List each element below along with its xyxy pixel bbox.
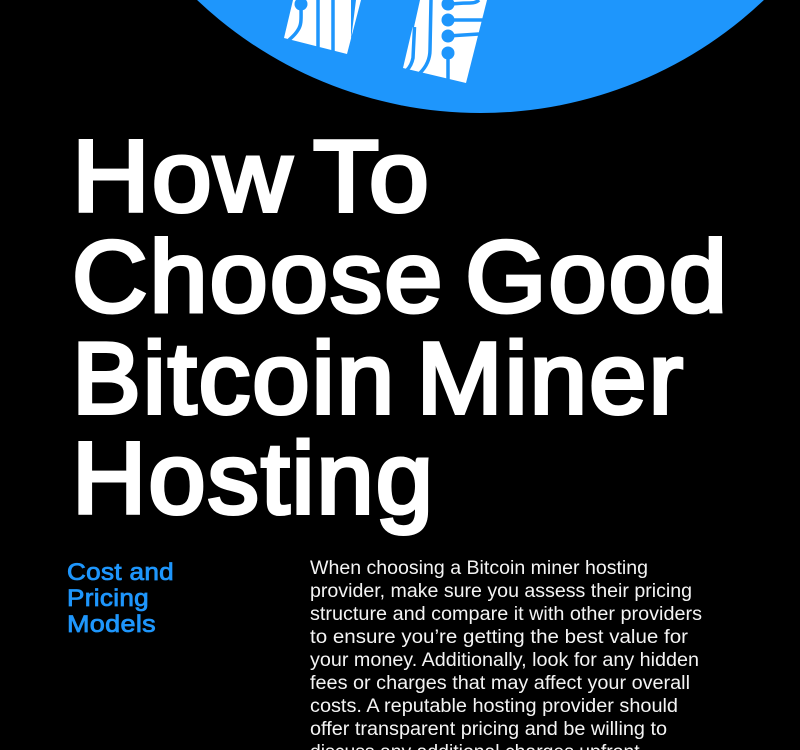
title: Bitcoin Miner <box>72 323 685 435</box>
title: Hosting <box>72 423 435 535</box>
body text: provider, make sure you assess their pricing <box>310 581 692 602</box>
body text: When choosing a Bitcoin miner hosting <box>310 558 648 579</box>
section heading: cost and pricing models: Cost and <box>67 559 174 586</box>
section heading: cost and pricing models <box>67 559 174 638</box>
section heading: cost and pricing models: Models <box>67 611 156 638</box>
body text <box>310 558 702 750</box>
icon: left chip shard <box>284 0 361 54</box>
body text: to ensure you’re getting the best value for <box>310 627 689 648</box>
title: Choose Good <box>72 222 729 334</box>
section heading: cost and pricing models: Pricing <box>67 585 149 612</box>
icon: right chip shard <box>403 0 487 83</box>
body text: structure and compare it with other providers <box>310 604 702 625</box>
body text: offer transparent pricing and be willing to <box>310 719 667 740</box>
body text: your money. Additionally, look for any hidden <box>310 650 699 671</box>
blue circle with chip icon <box>68 0 800 113</box>
title <box>72 121 729 535</box>
title: How To <box>72 121 431 233</box>
body text: fees or charges that may affect your overall <box>310 673 690 694</box>
body text: costs. A reputable hosting provider should <box>310 696 678 717</box>
